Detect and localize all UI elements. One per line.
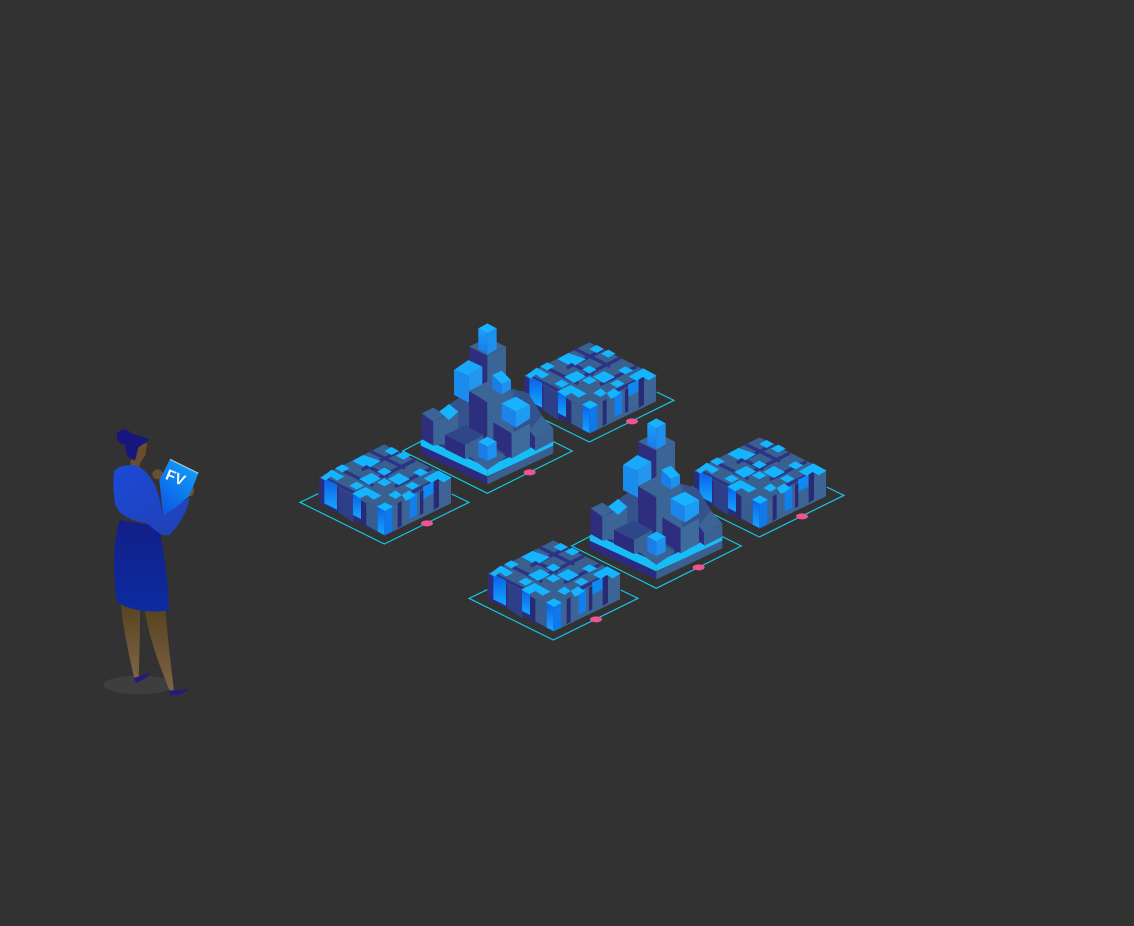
hands <box>152 469 194 496</box>
floor shadow <box>103 676 173 694</box>
flat city block: left <box>300 444 469 544</box>
flat city block: right <box>675 437 844 537</box>
tablet logo: FV <box>163 467 188 490</box>
tower city block: front <box>572 418 741 588</box>
tablet <box>159 459 198 518</box>
flat city block: front <box>469 540 638 640</box>
sleeve <box>113 465 189 535</box>
shoes <box>134 672 189 695</box>
figure: woman holding tablet <box>103 429 198 695</box>
tower city block: back <box>403 323 572 493</box>
tablet top edge <box>170 459 198 473</box>
flat city block: back centre <box>505 342 674 442</box>
neck and face <box>131 443 147 468</box>
dress <box>114 520 169 612</box>
hair <box>117 429 150 461</box>
legs <box>121 603 174 692</box>
